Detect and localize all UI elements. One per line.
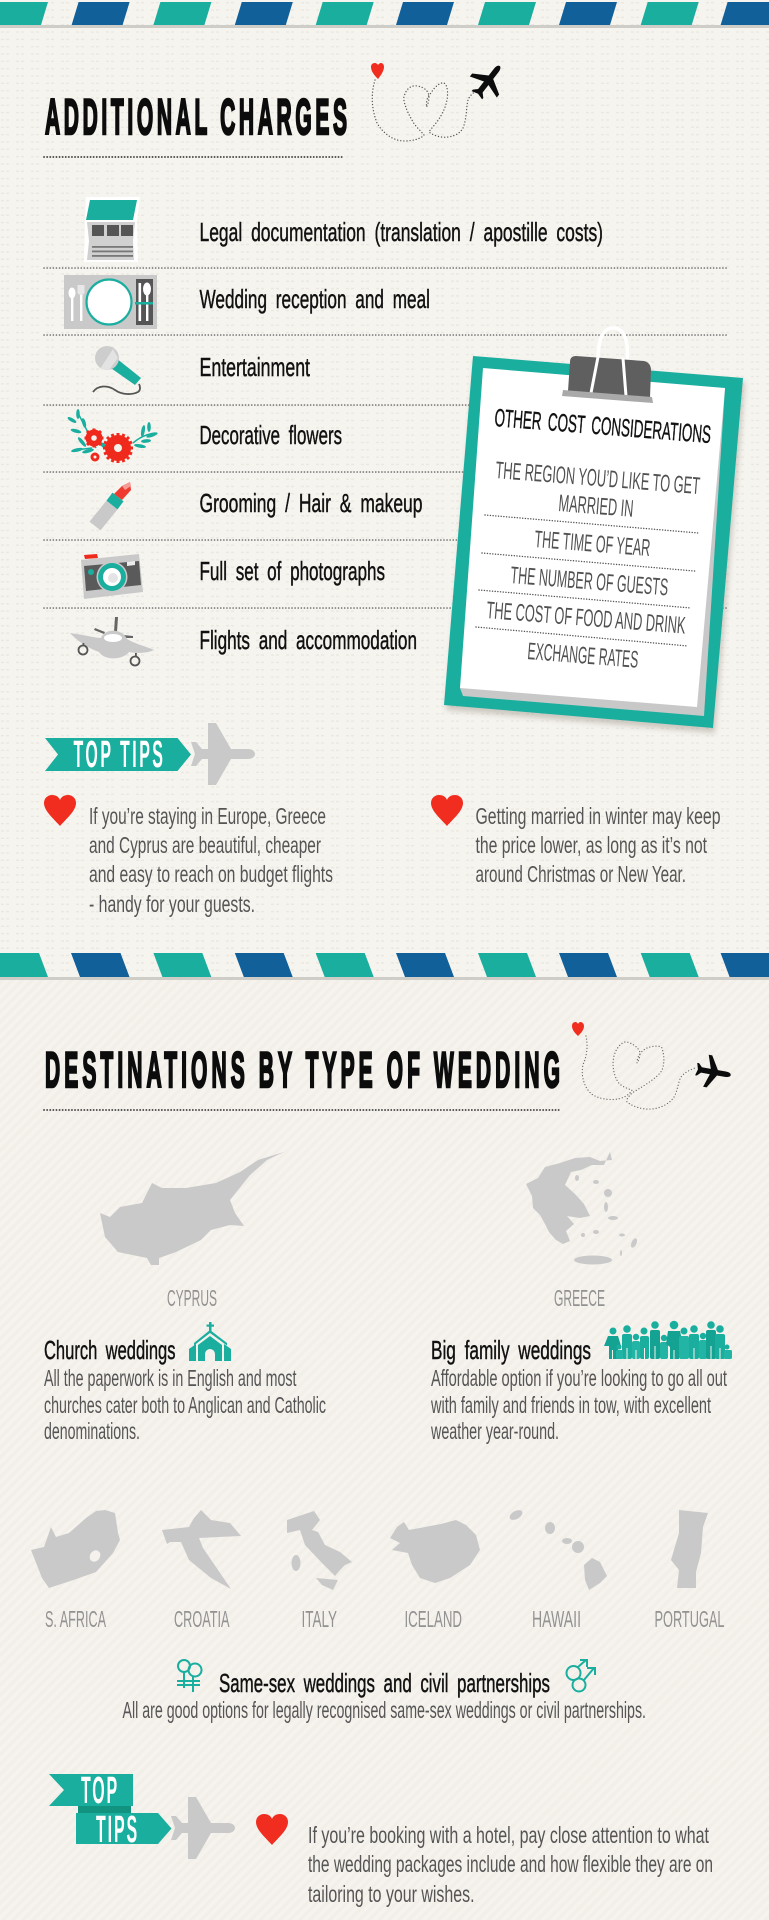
label: Cyprus: CYPRUS <box>167 1285 217 1311</box>
list: cost considerations: MARRIED IN <box>558 490 634 523</box>
top tips ribbon with plane (section 2) <box>49 1770 235 1859</box>
icon: lipstick <box>90 482 131 530</box>
map: Hawaii <box>508 1508 607 1590</box>
tip 2: heart and text <box>431 795 720 887</box>
label: entertainment: Entertainment <box>200 352 311 382</box>
list: cost considerations: THE TIME OF YEAR <box>534 526 651 562</box>
icon: place setting <box>64 275 157 329</box>
label: Croatia: CROATIA <box>174 1606 230 1632</box>
list separators <box>44 268 729 608</box>
map: Greece <box>526 1152 638 1264</box>
panel: other cost considerations clipboard <box>444 328 745 733</box>
text block: big family weddings <box>430 1321 732 1444</box>
tip 1: heart and text: If you’re staying in Europe, Greece <box>89 803 326 829</box>
tip 1: heart and text: and easy to reach on budget flights <box>89 861 333 887</box>
top tips ribbon with plane (section 1) <box>45 723 255 785</box>
map: Croatia <box>162 1510 241 1589</box>
text block: church weddings: denominations. <box>44 1418 140 1444</box>
map: Cyprus <box>100 1152 284 1265</box>
icon: male symbols <box>566 1660 595 1692</box>
top tips ribbon with plane (section 2): TIPS <box>96 1809 137 1851</box>
text block: big family weddings: Big family weddings <box>431 1335 591 1365</box>
icon: front-view plane <box>70 617 154 666</box>
text block: same-sex weddings <box>122 1660 646 1723</box>
tip 1: heart and text: and Cyprus are beautiful, cheaper <box>89 832 321 858</box>
text block: church weddings: All the paperwork is in English and most <box>44 1365 297 1391</box>
list: cost considerations <box>476 457 701 674</box>
icon: female symbols <box>177 1660 202 1692</box>
text block: church weddings <box>44 1322 326 1444</box>
tip 3: heart and text: tailoring to your wishes. <box>308 1881 474 1907</box>
icon: legal document <box>84 197 140 262</box>
map: South Africa <box>31 1510 120 1588</box>
icon: decorative flowers <box>67 409 158 463</box>
icon: heart and dotted flight path with plane <box>371 55 513 141</box>
tip 3: heart and text <box>256 1814 713 1907</box>
label: flights and accommodation: Flights and accommodation <box>200 625 417 655</box>
background: lower section <box>0 978 769 1920</box>
airmail stripe band middle <box>0 953 769 980</box>
text block: big family weddings: weather year-round. <box>430 1418 559 1444</box>
label: Italy: ITALY <box>302 1606 337 1632</box>
icon: microphone <box>93 346 141 394</box>
top tips ribbon with plane (section 1): TOP TIPS <box>74 734 163 776</box>
label: photographs: Full set of photographs <box>200 556 385 586</box>
panel: additional charges list <box>64 197 603 666</box>
icon: binder clip <box>562 328 653 403</box>
label: wedding reception: Wedding reception and meal <box>200 284 430 314</box>
tip 1: heart and text: - handy for your guests. <box>89 891 255 917</box>
top tips ribbon with plane (section 2): TOP <box>81 1770 117 1812</box>
icon: camera <box>81 554 143 599</box>
icon: heart and dotted flight path with plane 2 <box>572 1022 734 1109</box>
airmail stripe band top <box>0 2 769 28</box>
map: Iceland <box>390 1520 480 1583</box>
text block: same-sex weddings: Same-sex weddings and civil partnerships <box>219 1668 550 1698</box>
text block: church weddings: churches cater both to Anglican and Catholic <box>44 1392 326 1418</box>
label: Iceland: ICELAND <box>404 1606 462 1632</box>
title: destinations by type of wedding: DESTINATIONS BY TYPE OF WEDDING <box>45 1043 560 1099</box>
list: cost considerations: EXCHANGE RATES <box>527 638 639 674</box>
label: S. Africa: S. AFRICA <box>45 1606 106 1632</box>
title: additional charges: ADDITIONAL CHARGES <box>45 90 347 146</box>
label: Greece: GREECE <box>554 1285 605 1311</box>
icon: church <box>189 1322 231 1361</box>
label: decorative flowers: Decorative flowers <box>200 420 342 450</box>
tip 1: heart and text <box>44 795 333 917</box>
map: Portugal <box>671 1510 708 1588</box>
icon: family group <box>604 1321 732 1359</box>
map: Italy <box>287 1511 352 1590</box>
background: upper section <box>0 0 769 978</box>
label: grooming: Grooming / Hair & makeup <box>200 488 422 518</box>
text block: church weddings: Church weddings <box>44 1335 176 1365</box>
label: Hawaii: HAWAII <box>532 1606 581 1632</box>
